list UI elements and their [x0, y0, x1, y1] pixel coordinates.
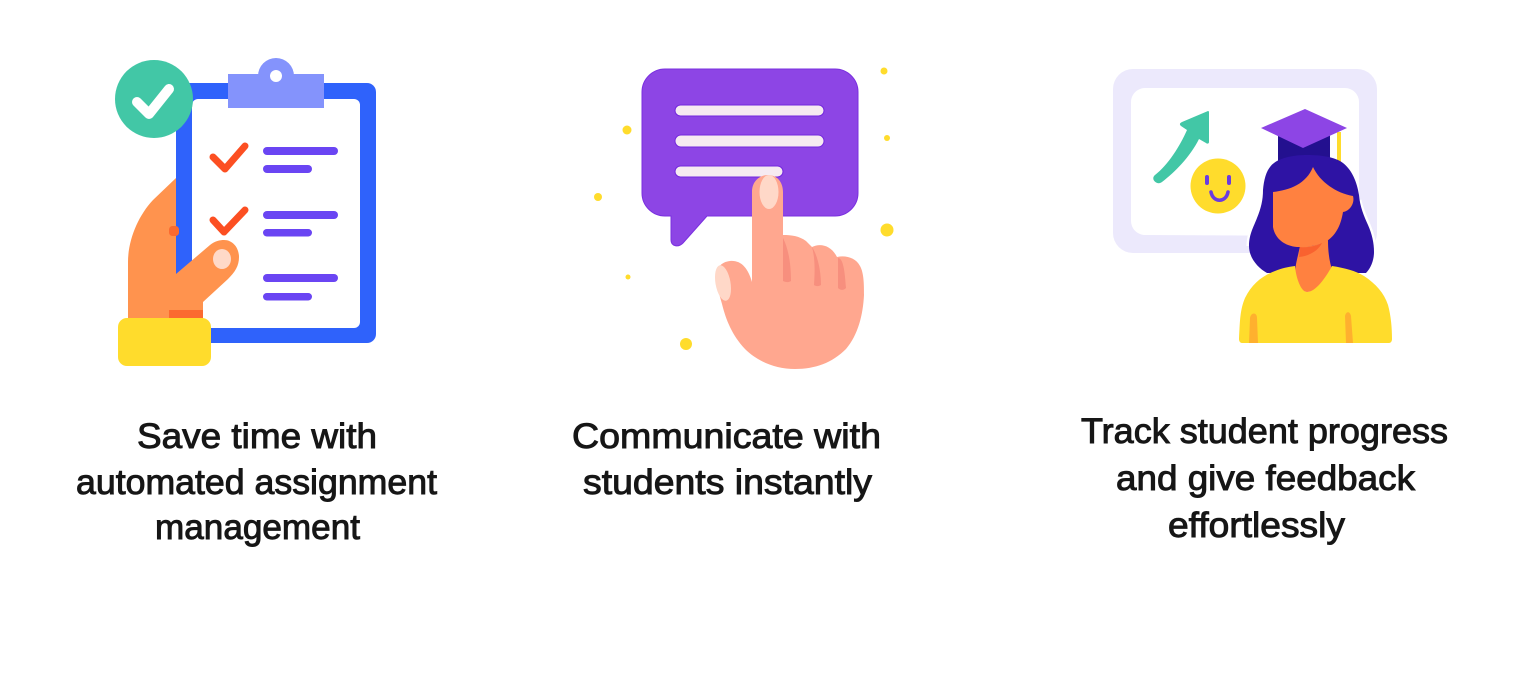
caption: student progress: Track student progress — [1081, 412, 1448, 451]
caption: assignment management: automated assignment — [76, 463, 437, 502]
decorative yellow dots — [594, 68, 894, 350]
caption: instant communication: Communicate with — [572, 417, 881, 456]
icon: presentation board — [1113, 69, 1377, 253]
icon: pointing hand — [712, 175, 864, 369]
icon: smiley face — [1190, 158, 1246, 214]
caption: student progress: effortlessly — [1168, 506, 1346, 545]
caption: instant communication: students instantly — [583, 463, 873, 502]
panel: instant communication — [572, 68, 894, 502]
icon: graduate student — [1239, 109, 1392, 343]
caption: student progress: and give feedback — [1116, 459, 1416, 498]
icon: upward progress arrow — [1153, 111, 1209, 183]
icon: checklist row 3 — [263, 274, 338, 300]
caption: assignment management: Save time with — [137, 417, 377, 456]
caption: instant communication — [572, 417, 881, 502]
icon: checklist row 2 — [213, 210, 338, 236]
icon: clipboard — [176, 58, 376, 343]
icon: checklist row 1 — [213, 146, 338, 173]
caption: student progress — [1081, 412, 1448, 545]
caption: assignment management: management — [155, 508, 360, 547]
caption: assignment management — [76, 417, 437, 547]
panel: assignment management — [76, 58, 437, 547]
icon: green check badge — [115, 60, 193, 138]
icon: speech bubble — [642, 69, 858, 246]
icon: hand holding clipboard — [118, 178, 239, 366]
panel: student progress — [1081, 69, 1448, 545]
